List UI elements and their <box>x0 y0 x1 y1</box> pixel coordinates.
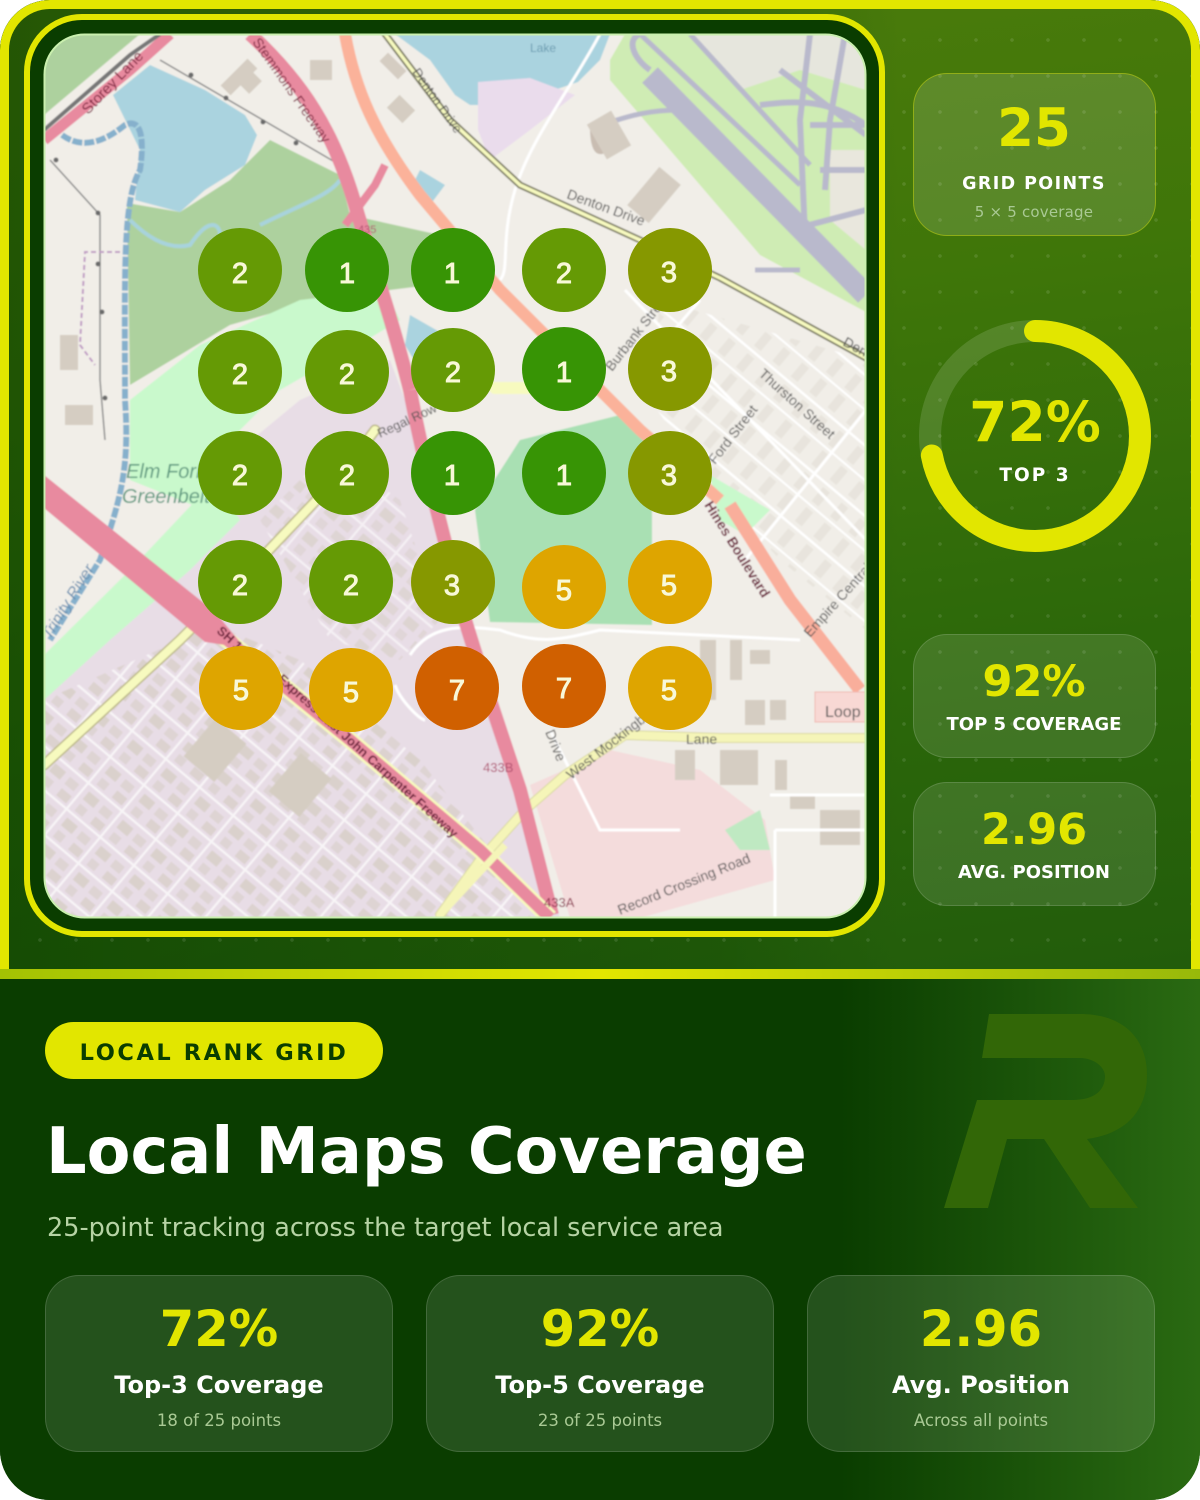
lakes <box>113 65 257 212</box>
row 4: 5 <box>661 570 677 602</box>
motorways <box>44 34 552 918</box>
row 2 <box>198 327 712 414</box>
label: Avg. Position <box>892 1371 1070 1399</box>
map labels: Hines Boulevard <box>701 498 774 600</box>
label: grid points: GRID POINTS <box>962 174 1106 194</box>
value: 25: 25 <box>997 98 1071 159</box>
donut gauge: top 3 <box>919 320 1151 552</box>
row 5 <box>199 644 712 732</box>
residential grid right <box>650 300 866 630</box>
loop shield <box>815 692 866 722</box>
row 2: 3 <box>661 356 677 388</box>
map with rank grid <box>44 34 866 918</box>
metric card: top-5 coverage <box>426 1275 774 1452</box>
airport <box>610 34 866 312</box>
river <box>50 123 142 640</box>
map labels: Elm Fork <box>126 461 207 483</box>
row 1: 1 <box>339 258 355 290</box>
map labels: West Mockingbird <box>563 701 660 782</box>
map labels: Record Crossing Road <box>615 850 752 918</box>
stat card: average position <box>913 782 1156 906</box>
map labels: Denton Drive <box>410 65 465 136</box>
map labels: SH 183 <box>214 623 256 663</box>
metric card: average position <box>807 1275 1155 1452</box>
row 2: 1 <box>556 357 572 389</box>
row 3 <box>198 431 712 515</box>
map labels: Lake <box>530 41 556 55</box>
row 2: 2 <box>232 359 248 391</box>
lavender commercial area <box>44 360 560 918</box>
gradient divider band <box>0 969 1200 979</box>
map labels: Ford Street <box>705 402 761 467</box>
street lines <box>395 34 866 918</box>
map frame <box>24 14 885 937</box>
value: 92%: 92% <box>983 657 1085 707</box>
top section background <box>0 0 1200 969</box>
map labels: Burbank Street <box>602 290 672 374</box>
row 3: 2 <box>339 460 355 492</box>
map labels: 433B <box>483 760 513 775</box>
donut gauge: top 3: 72% <box>969 390 1101 454</box>
rank grid markers <box>198 228 712 732</box>
title: Local Maps Coverage <box>46 1115 807 1189</box>
row 3: 1 <box>556 460 572 492</box>
row 1: 1 <box>444 258 460 290</box>
row 5: 7 <box>449 675 465 707</box>
map labels: Loop <box>825 704 861 721</box>
map labels: Stemmons Freeway <box>250 35 334 146</box>
value: 2.96 <box>920 1300 1042 1358</box>
note: Across all points <box>914 1411 1048 1430</box>
badge: local rank grid: LOCAL RANK GRID <box>80 1040 348 1066</box>
label: average position: AVG. POSITION <box>958 862 1110 883</box>
label: Top-3 Coverage <box>114 1371 324 1399</box>
row 2: 2 <box>445 357 461 389</box>
map labels: 435 <box>358 224 376 236</box>
row 5: 5 <box>661 675 677 707</box>
note: coverage: 5 × 5 coverage <box>975 203 1093 221</box>
row 2: 2 <box>339 359 355 391</box>
value: 2.96: 2.96 <box>981 805 1087 855</box>
bottom section <box>0 979 1200 1500</box>
badge: local rank grid <box>45 1022 383 1079</box>
row 4: 3 <box>444 570 460 602</box>
label: top 5 coverage: TOP 5 COVERAGE <box>947 714 1121 735</box>
row 1: 2 <box>232 258 248 290</box>
row 4 <box>198 540 712 629</box>
map labels: Thurston Street <box>756 365 838 442</box>
value: 92% <box>541 1300 659 1358</box>
row 3: 3 <box>661 460 677 492</box>
map labels: Drive <box>542 727 569 764</box>
map labels: Express East John Carpenter Freeway <box>275 671 462 841</box>
power lines <box>50 60 340 440</box>
map labels: 433A <box>544 895 575 910</box>
note: 23 of 25 points <box>538 1411 662 1430</box>
map labels: Regal Row <box>375 400 439 441</box>
label: Top-5 Coverage <box>495 1371 705 1399</box>
row 1 <box>198 228 712 312</box>
pink retail <box>530 750 775 918</box>
yellow roads <box>44 34 866 915</box>
trunk road <box>345 34 720 500</box>
row 3: 2 <box>232 460 248 492</box>
row 4: 2 <box>343 570 359 602</box>
row 1: 3 <box>661 257 677 289</box>
parks <box>44 34 140 115</box>
stat card: grid points <box>913 73 1156 236</box>
row 5: 5 <box>343 677 359 709</box>
logo mark <box>944 1014 1147 1208</box>
row 1: 2 <box>556 258 572 290</box>
row 5: 7 <box>556 673 572 705</box>
row 4: 5 <box>556 575 572 607</box>
map labels: Greenbelt <box>122 486 211 508</box>
map labels: Lane <box>686 731 717 747</box>
value: 72% <box>160 1300 278 1358</box>
subtitle: 25-point tracking across the target local service area <box>47 1213 724 1243</box>
map labels: Storey Lane <box>79 48 147 118</box>
map labels <box>39 35 888 918</box>
row 4: 2 <box>232 570 248 602</box>
row 3: 1 <box>444 460 460 492</box>
buildings <box>60 53 860 845</box>
row 5: 5 <box>233 675 249 707</box>
donut gauge: top 3: TOP 3 <box>999 465 1071 486</box>
note: 18 of 25 points <box>157 1411 281 1430</box>
stat card: top 5 coverage <box>913 634 1156 758</box>
metric card: top-3 coverage <box>45 1275 393 1452</box>
map labels: Denton Drive <box>565 186 647 229</box>
base land <box>44 34 866 918</box>
